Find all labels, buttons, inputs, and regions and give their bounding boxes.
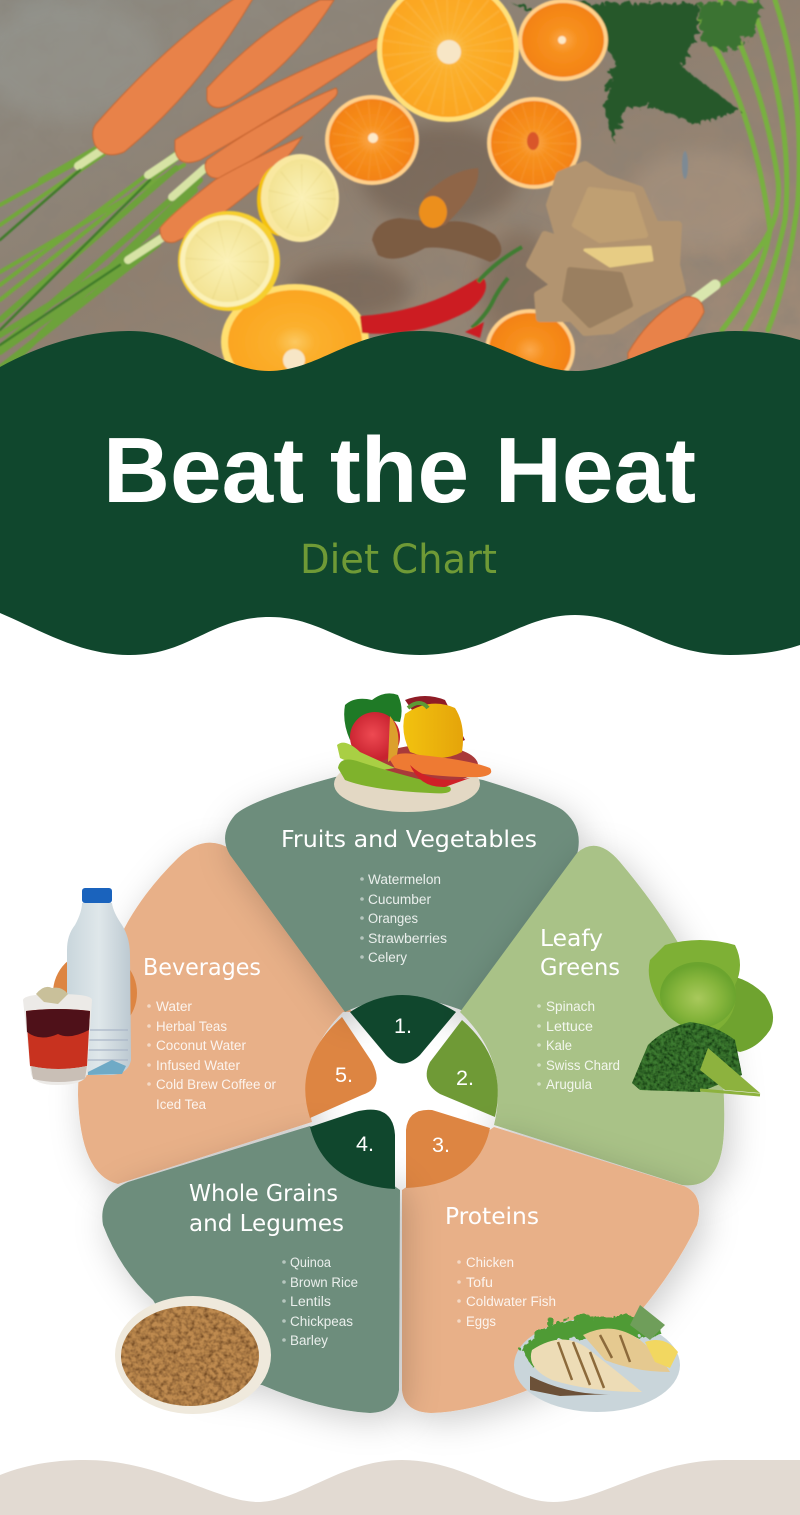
number tab 1: 1. [394,1015,412,1038]
heading: leafy greens [540,926,620,981]
number tab 5: 5. [335,1064,353,1087]
number tab 5 [305,1017,377,1118]
list: fruits and vegetables: Cucumber [368,892,432,907]
title: Beat the Heat [103,418,696,522]
list: whole grains and legumes: Lentils [290,1294,331,1309]
list: fruits and vegetables [360,872,447,965]
icon: lettuce and kale [632,940,773,1095]
list: beverages: Infused Water [156,1058,240,1073]
list: leafy greens: Swiss Chard [546,1058,620,1073]
list: proteins [457,1255,556,1329]
list: fruits and vegetables: Celery [368,950,407,965]
list: leafy greens: Lettuce [546,1019,593,1034]
ginger [530,165,682,332]
list: beverages: Water [156,999,192,1014]
list: fruits and vegetables: Oranges [368,911,418,926]
panel: whole grains and legumes [102,1110,400,1414]
oranges [221,0,608,400]
heading: leafy greens: Leafy [540,926,603,952]
list: leafy greens [537,999,620,1092]
bottom wave [0,1460,800,1515]
list: leafy greens: Kale [546,1038,572,1053]
list: beverages: Herbal Teas [156,1019,227,1034]
turmeric [372,168,501,262]
icon: bowl of grains [115,1296,271,1414]
list: whole grains and legumes [282,1255,358,1348]
list: beverages: Cold Brew Coffee or [156,1077,276,1092]
chili peppers [360,247,522,338]
title banner [0,331,800,655]
list: proteins: Chicken [466,1255,514,1270]
lemons [178,154,339,311]
panel: fruits and vegetables [225,693,579,1064]
list: leafy greens: Spinach [546,999,595,1014]
heading: beverages: Beverages [143,955,261,981]
heading: leafy greens: Greens [540,955,620,981]
list: whole grains and legumes: Barley [290,1333,328,1348]
number tab 1 [350,995,456,1064]
number tab 2: 2. [456,1067,474,1090]
list: leafy greens: Arugula [546,1077,592,1092]
list: beverages [147,999,276,1112]
list: fruits and vegetables: Strawberries [368,931,447,946]
heading: whole grains and legumes: Whole Grains [189,1181,338,1207]
list: proteins: Tofu [466,1275,493,1290]
number tab 4 [310,1110,395,1189]
number tab 3: 3. [432,1134,450,1157]
heading: proteins: Proteins [445,1204,539,1230]
list: whole grains and legumes: Chickpeas [290,1314,353,1329]
heading: whole grains and legumes: and Legumes [189,1211,344,1237]
list: fruits and vegetables: Watermelon [368,872,441,887]
list: whole grains and legumes: Brown Rice [290,1275,358,1290]
carrot greens [508,0,760,138]
list: proteins: Eggs [466,1314,496,1329]
list: whole grains and legumes: Quinoa [290,1255,331,1270]
panel: beverages [23,843,377,1184]
number tab 3 [406,1110,490,1188]
list: beverages: Iced Tea [156,1097,206,1112]
number tab 4: 4. [356,1133,374,1156]
panel: proteins [402,1110,699,1413]
list: beverages: Coconut Water [156,1038,246,1053]
icon: grilled chicken plate [514,1305,680,1412]
list: proteins: Coldwater Fish [466,1294,556,1309]
panel: leafy greens [427,846,773,1185]
icon: water bottle and iced tea [23,888,137,1085]
number tab 2 [427,1020,498,1117]
icon: plate of vegetables [334,693,491,812]
heading: fruits and vegetables: Fruits and Vegetables [281,827,537,853]
subtitle: Diet Chart [300,537,497,583]
hero photo: citrus, carrots, ginger and chili on stone [0,0,800,400]
heading: whole grains and legumes [189,1181,344,1237]
